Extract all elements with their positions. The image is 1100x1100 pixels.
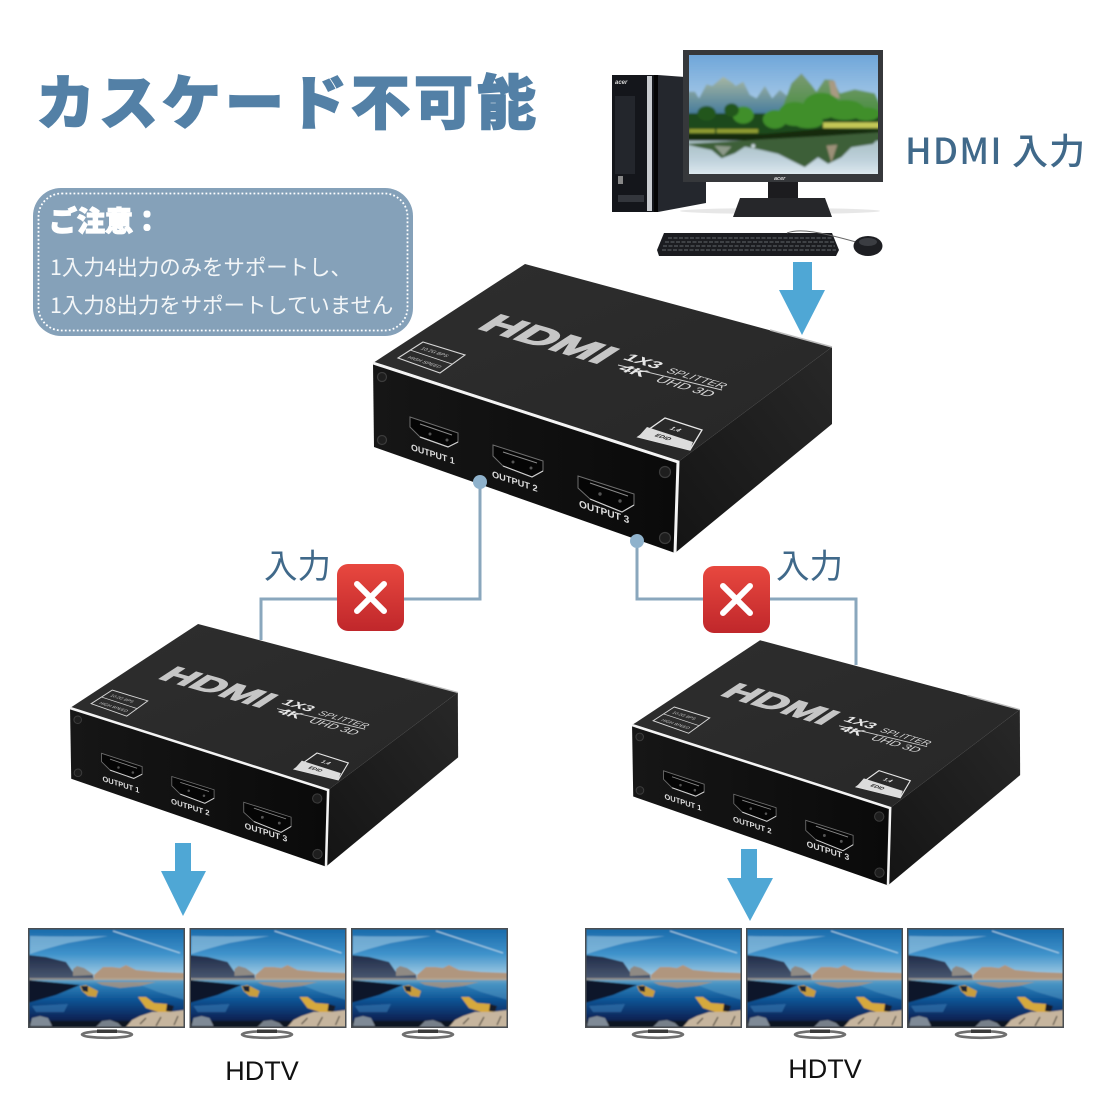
- port labels: OUTPUT 1: [411, 442, 455, 466]
- tower PC: [612, 75, 706, 212]
- monitor: [683, 50, 885, 217]
- badge: right not allowed: [703, 566, 770, 633]
- splitter: left device: 10.2G BPS: [109, 694, 135, 703]
- splitter: main device: HIGH SPEED: [405, 356, 443, 369]
- splitter: right device: 4K: [836, 724, 870, 738]
- label: left HDTV: HDTV: [225, 1056, 299, 1086]
- splitter: left device: HDMI: [151, 662, 286, 712]
- splitter: left device: SPLITTER: [314, 710, 372, 730]
- arrow: left splitter to TVs: [161, 843, 206, 916]
- label: right input: 入力: [776, 539, 843, 588]
- product name: 1X3: [619, 352, 667, 371]
- splitter: right device: SPLITTER: [876, 727, 934, 747]
- splitter: main device: 1.4: [667, 426, 683, 433]
- splitter: left device: OUTPUT 3: [245, 820, 288, 844]
- splitter: left device: 1.4: [319, 760, 332, 766]
- splitter: left device: HIGH SPEED: [98, 701, 130, 713]
- arrow: right splitter to TVs: [727, 849, 773, 921]
- monitor: acer: [774, 176, 786, 182]
- splitter: main device: 10.2G BPS: [418, 347, 450, 358]
- splitter: right device: OUTPUT 3: [807, 839, 850, 862]
- splitter: left device: OUTPUT 2: [171, 796, 210, 818]
- product name: UHD 3D: [651, 374, 720, 399]
- splitter: right device: OUTPUT 2: [733, 814, 772, 836]
- splitter: left device: 1X3: [278, 698, 319, 714]
- splitter: left device: 4K: [274, 707, 308, 721]
- monitor screen landscape: [689, 55, 878, 174]
- note line 2: 1入力8出力をサポートしていません: [50, 289, 393, 320]
- panel: caution note: [33, 188, 413, 336]
- splitter: left device: [70, 623, 459, 868]
- HDMI logo text: HDMI: [468, 310, 628, 369]
- title: カスケード不可能: [36, 56, 540, 141]
- splitter: right device: 1.4: [881, 778, 894, 784]
- splitter: left device: OUTPUT 1: [102, 774, 139, 795]
- TV group: right: [585, 928, 1064, 1038]
- badge: left not allowed: [337, 564, 404, 631]
- port labels: OUTPUT 3: [579, 499, 630, 527]
- label: HDMI input: HDMI 入力: [905, 123, 1086, 175]
- icon: desktop computer with monitor, keyboard and mouse: [612, 50, 885, 256]
- splitter: main device: [373, 264, 832, 553]
- splitter: main device: EDID: [652, 433, 673, 442]
- arrow: computer to splitter: [779, 262, 825, 335]
- TV group: left: [28, 928, 508, 1038]
- splitter: right device: UHD 3D: [867, 734, 924, 754]
- splitter: right device: [632, 639, 1021, 887]
- splitter: right device: HIGH SPEED: [660, 718, 692, 730]
- splitter: left device: EDID: [306, 766, 324, 773]
- label: left input: 入力: [264, 539, 331, 588]
- splitter: right device: 1X3: [840, 715, 881, 731]
- connector: right splitter link: [630, 534, 856, 665]
- keyboard: [657, 233, 839, 256]
- note heading: ご注意：: [49, 200, 161, 240]
- splitter: right device: HDMI: [713, 679, 848, 729]
- port labels: [411, 442, 630, 527]
- splitter: left device: UHD 3D: [305, 717, 362, 737]
- label: right HDTV: HDTV: [788, 1054, 862, 1084]
- mouse and cable: [787, 231, 882, 256]
- splitter: right device: EDID: [868, 784, 886, 791]
- splitter: right device: 10.2G BPS: [671, 711, 697, 720]
- tower PC: acer: [615, 80, 628, 86]
- product name: [614, 352, 730, 399]
- product name: 4K: [614, 363, 653, 380]
- port labels: OUTPUT 2: [492, 469, 538, 494]
- note line 1: 1入力4出力のみをサポートし、: [50, 251, 352, 282]
- splitter: right device: OUTPUT 1: [664, 792, 702, 813]
- product name: SPLITTER: [662, 367, 730, 390]
- connector: left splitter link: [261, 475, 487, 640]
